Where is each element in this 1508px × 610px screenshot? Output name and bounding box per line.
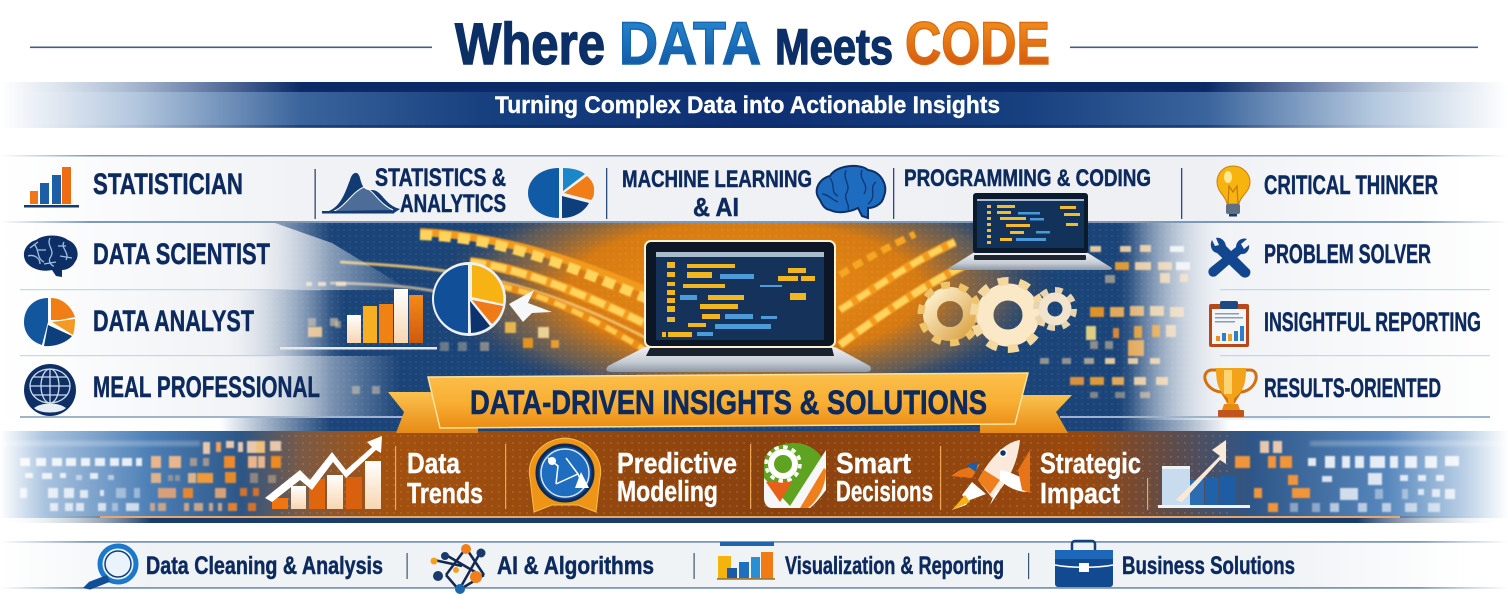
icon: blue brain (817, 166, 885, 218)
role: data analyst: DATA ANALYST (93, 305, 254, 338)
label: strategic impact (1040, 448, 1141, 510)
icon: small laptop (949, 193, 1112, 270)
icon: visualization bars (717, 542, 775, 580)
ribbon: data-driven insights and solutions (388, 373, 1072, 433)
subtitle banner: Turning Complex Data into Actionable Insights (495, 92, 1000, 119)
heading: machine learning and ai: & AI (693, 192, 739, 222)
bottom strip (0, 541, 1508, 589)
label: visualization and reporting: Visualization & Reporting (785, 552, 1004, 580)
role: statistician: STATISTICIAN (93, 168, 243, 201)
heading: programming and coding: PROGRAMMING & CODING (904, 165, 1151, 192)
role: problem solver: PROBLEM SOLVER (1264, 239, 1431, 269)
label: predictive modeling: Predictive (617, 448, 737, 480)
left panel: data analyst row (0, 290, 345, 356)
label: data trends: Data (407, 448, 461, 480)
icon: lightbulb (1217, 166, 1250, 216)
label: strategic impact: Strategic (1040, 448, 1141, 480)
label: predictive modeling: Modeling (617, 476, 718, 508)
subtitle banner (0, 82, 1508, 128)
title: CODE (905, 10, 1050, 77)
icon: statistician bars (24, 167, 79, 208)
icon: data analyst pie (24, 298, 75, 346)
icon: pie chart (528, 168, 594, 218)
icon: gears (921, 281, 1074, 349)
label: smart decisions (836, 448, 933, 508)
role: meal professional: MEAL PROFESSIONAL (93, 371, 320, 404)
label: smart decisions: Smart (836, 448, 911, 480)
chart: pie with arrow (432, 262, 552, 336)
icon: smart decisions (764, 443, 826, 508)
icon: rising trend chart (265, 436, 382, 509)
heading: statistics and analytics: ANALYTICS (400, 190, 506, 218)
heading: statistics and analytics (375, 164, 506, 218)
bottom band (0, 431, 1508, 523)
title: Meets (775, 19, 893, 75)
right panel: problem solver row (1130, 223, 1508, 290)
icon: ai network (430, 544, 486, 594)
right panel: results-oriented row (1130, 356, 1508, 420)
icon: navy brain (24, 236, 78, 277)
title (455, 10, 1050, 77)
label: strategic impact: Impact (1040, 478, 1120, 510)
separators top row (314, 168, 1182, 219)
role: data scientist: DATA SCIENTIST (93, 238, 270, 271)
left panel: meal professional row (0, 356, 400, 418)
ribbon: data-driven insights and solutions: DATA-DRIVEN INSIGHTS & SOLUTIONS (470, 384, 987, 422)
label: data cleaning and analysis: Data Cleaning & Analysis (146, 552, 383, 580)
heading: machine learning and ai (622, 166, 812, 222)
top row strip (0, 155, 1508, 223)
icon: magnifier (86, 546, 136, 588)
heading: statistics and analytics: STATISTICS & (375, 164, 506, 192)
left panel: data scientist row (0, 223, 410, 290)
label: business solutions: Business Solutions (1122, 552, 1295, 580)
icon: wrench and screwdriver (1208, 238, 1250, 278)
icon: central laptop with code (606, 241, 871, 372)
heading: machine learning and ai: MACHINE LEARNING (622, 166, 812, 193)
icon: rocket (951, 440, 1030, 510)
right panel: insightful reporting row (1130, 290, 1508, 356)
label: predictive modeling (617, 448, 737, 508)
label: data trends: Trends (407, 478, 483, 510)
icon: impact chart with arrow (1158, 440, 1250, 508)
icon: bell curve (322, 173, 400, 214)
icon: trophy (1205, 368, 1256, 417)
label: data trends (407, 448, 483, 510)
central data background (220, 165, 1230, 432)
icon: briefcase (1055, 541, 1113, 587)
title: Where (455, 12, 605, 77)
chart: bars (280, 289, 437, 350)
icon: predictive modeling badge (529, 438, 601, 512)
icon: clipboard report (1209, 301, 1249, 347)
title: DATA (619, 10, 761, 77)
icon: globe (24, 364, 76, 416)
label: smart decisions: Decisions (836, 476, 933, 508)
label: ai and algorithms: AI & Algorithms (497, 552, 654, 580)
